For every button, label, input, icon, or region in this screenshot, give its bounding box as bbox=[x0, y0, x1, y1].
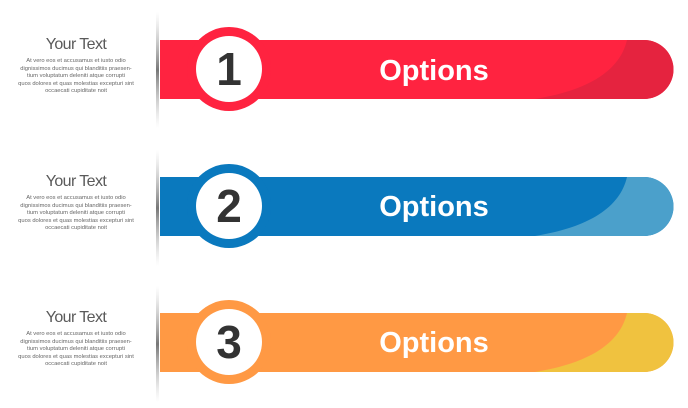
text block 1: Your Text bbox=[46, 36, 106, 53]
text block 3: At vero eos et accusamus et iusto odio bbox=[26, 331, 126, 337]
text block 1: quos dolores et quas molestias excepturi sint bbox=[18, 81, 134, 87]
option 3 bar bbox=[160, 300, 688, 384]
text block 2: occaecati cupiditate noit bbox=[45, 225, 107, 231]
text block 2: quos dolores et quas molestias excepturi sint bbox=[18, 218, 134, 224]
text block 1: dignissimos ducimus qui blanditiis praesen- bbox=[20, 66, 132, 72]
option 1 bar: 1 bbox=[216, 43, 242, 95]
text block 2: At vero eos et accusamus et iusto odio bbox=[26, 195, 126, 201]
text block 2: tium voluptatum deleniti atque corrupti bbox=[27, 210, 125, 216]
option 3 bar: Options bbox=[379, 327, 489, 359]
text block 3: dignissimos ducimus qui blanditiis praesen- bbox=[20, 339, 132, 345]
text block 3: occaecati cupiditate noit bbox=[45, 361, 107, 367]
option 2 bar: 2 bbox=[216, 180, 242, 232]
text block 3 bbox=[18, 309, 134, 367]
option 1 bar: Options bbox=[379, 55, 489, 87]
text block 2: Your Text bbox=[46, 173, 106, 190]
text block 1: tium voluptatum deleniti atque corrupti bbox=[27, 73, 125, 79]
option 1 bar bbox=[160, 27, 688, 111]
text block 3: Your Text bbox=[46, 309, 106, 326]
text block 1: occaecati cupiditate noit bbox=[45, 88, 107, 94]
option 2 bar bbox=[160, 164, 688, 248]
text block 3: tium voluptatum deleniti atque corrupti bbox=[27, 346, 125, 352]
text block 2: dignissimos ducimus qui blanditiis praesen- bbox=[20, 203, 132, 209]
option 2 bar: Options bbox=[379, 191, 489, 223]
option 3 bar: 3 bbox=[216, 316, 242, 368]
text block 3: quos dolores et quas molestias excepturi sint bbox=[18, 354, 134, 360]
text block 1: At vero eos et accusamus et iusto odio bbox=[26, 58, 126, 64]
text block 2 bbox=[18, 173, 134, 231]
text block 1 bbox=[18, 36, 134, 94]
option bars bbox=[156, 18, 674, 396]
